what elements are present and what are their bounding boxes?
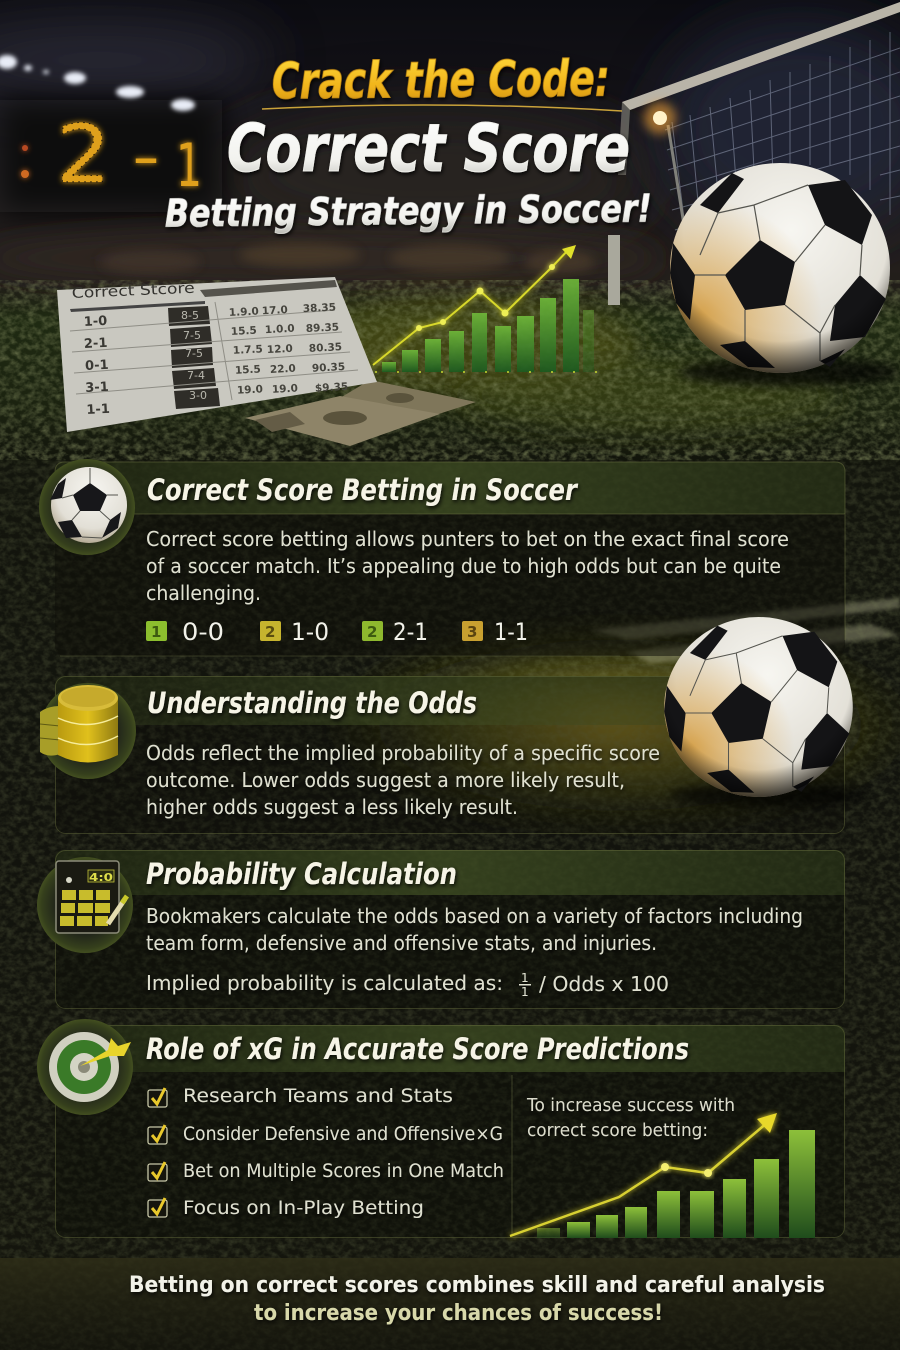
panel body text: higher odds suggest a less likely result. [146,795,518,819]
betting slip [57,277,377,432]
betting slip: 8-5 [181,309,199,322]
scoreboard showing 2-1: - [132,125,160,190]
scoreboard showing 2-1: 1 [176,131,202,201]
panel body text: challenging. [146,581,261,605]
betting slip: 19.0 [237,383,263,397]
betting slip: 15.5 [235,363,261,377]
panel body text [146,904,803,955]
checklist [148,1085,504,1219]
chart caption [526,1095,735,1141]
score chips: 1-1 [494,618,528,646]
betting slip: 17.0 [262,304,288,317]
footer line 1: Betting on correct scores combines skill and careful analysis [129,1273,825,1298]
goal and net [608,2,900,305]
betting slip: $9.35 [315,381,348,395]
checklist: Consider Defensive and Offensive×G [183,1123,503,1145]
panel heading: Correct Score Betting in Soccer [147,473,578,507]
score chips [146,618,528,646]
hero growth chart [373,245,600,372]
title line: Betting Strategy in Soccer: Betting Strategy in Soccer! [165,186,652,236]
panel heading: Role of xG in Accurate Score Predictions [146,1032,689,1066]
betting slip: 90.35 [312,361,345,375]
checklist: Research Teams and Stats [183,1085,453,1107]
implied probability formula: / Odds x 100 [539,972,669,996]
implied probability formula [146,971,669,999]
icon: gold coin stack [40,683,136,779]
implied probability formula: 1 [521,971,529,985]
betting slip: 2-1 [84,336,108,352]
betting slip: 7-5 [185,347,203,360]
betting slip: Correct Stcore [71,281,195,302]
score chips: 1-0 [291,618,329,646]
panel body text: of a soccer match. It’s appealing due to high odds but can be quite [146,554,781,578]
panel body text: Correct score betting allows punters to bet on the exact final score [146,527,789,551]
betting slip: 0-1 [85,358,109,374]
footer banner [0,1258,900,1350]
chart caption: To increase success with [526,1095,735,1116]
betting slip: 89.35 [306,321,339,335]
panel: role of xG [55,1025,845,1238]
footer line 2: to increase your chances of success! [254,1301,663,1326]
cash under slip [245,380,476,446]
betting slip: 80.35 [309,341,342,355]
betting slip: 19.0 [272,383,298,396]
score chips: 1 [151,623,161,641]
title line: Crack the Code: Crack the Code: [272,50,610,110]
panel: correct score betting [55,462,845,656]
soccer ball mid-page [664,617,870,807]
chart caption: correct score betting: [527,1120,708,1141]
panel heading: Probability Calculation [146,857,457,891]
title [165,50,652,236]
icon: calculator [37,857,133,953]
icon: soccer ball badge [39,459,135,555]
betting slip: 22.0 [270,363,296,376]
icon: target with arrow [37,1019,133,1115]
score chips: 2-1 [393,618,428,646]
implied probability formula: 1 [521,985,529,999]
score chips: 2 [265,623,275,641]
panel heading: Understanding the Odds [147,686,477,720]
betting slip: 7-5 [183,329,201,342]
betting slip: 38.35 [302,301,336,315]
panel body text [146,527,789,605]
betting slip: 1.9.0 [229,305,259,319]
betting slip: 12.0 [267,343,293,356]
betting slip: 7-4 [187,369,205,382]
scoreboard showing 2-1: 2 [56,108,111,201]
panel body text: outcome. Lower odds suggest a more likely result, [146,768,625,792]
betting slip: 3-0 [189,389,207,402]
stadium floodlights [0,55,195,111]
implied probability formula: Implied probability is calculated as: [146,971,503,995]
betting slip: 1-1 [86,402,110,418]
title line: Correct Score: Correct Score [227,110,630,187]
score chips: 3 [467,623,477,641]
betting slip: 1.7.5 [233,343,263,357]
panel body text: team form, defensive and offensive stats, and injuries. [146,931,657,955]
growth bar chart [510,1113,815,1238]
betting slip: 3-1 [85,380,109,396]
checklist: Focus on In-Play Betting [183,1197,424,1219]
score chips: 0-0 [182,618,224,646]
betting slip: 15.5 [231,325,257,338]
soccer ball large [670,163,900,386]
betting slip: 1-0 [83,314,108,330]
panel body text: Bookmakers calculate the odds based on a variety of factors including [146,904,803,928]
panel: understanding the odds [55,676,845,834]
score chips: 2 [367,623,377,641]
panel body text [146,741,660,819]
scoreboard showing 2-1 [21,108,202,201]
betting slip: 1.0.0 [265,323,295,336]
panel: probability calculation [55,850,845,1009]
checklist: Bet on Multiple Scores in One Match [183,1160,504,1182]
panel body text: Odds reflect the implied probability of a specific score [146,741,660,765]
icon: calculator: 4:0 [89,871,113,884]
